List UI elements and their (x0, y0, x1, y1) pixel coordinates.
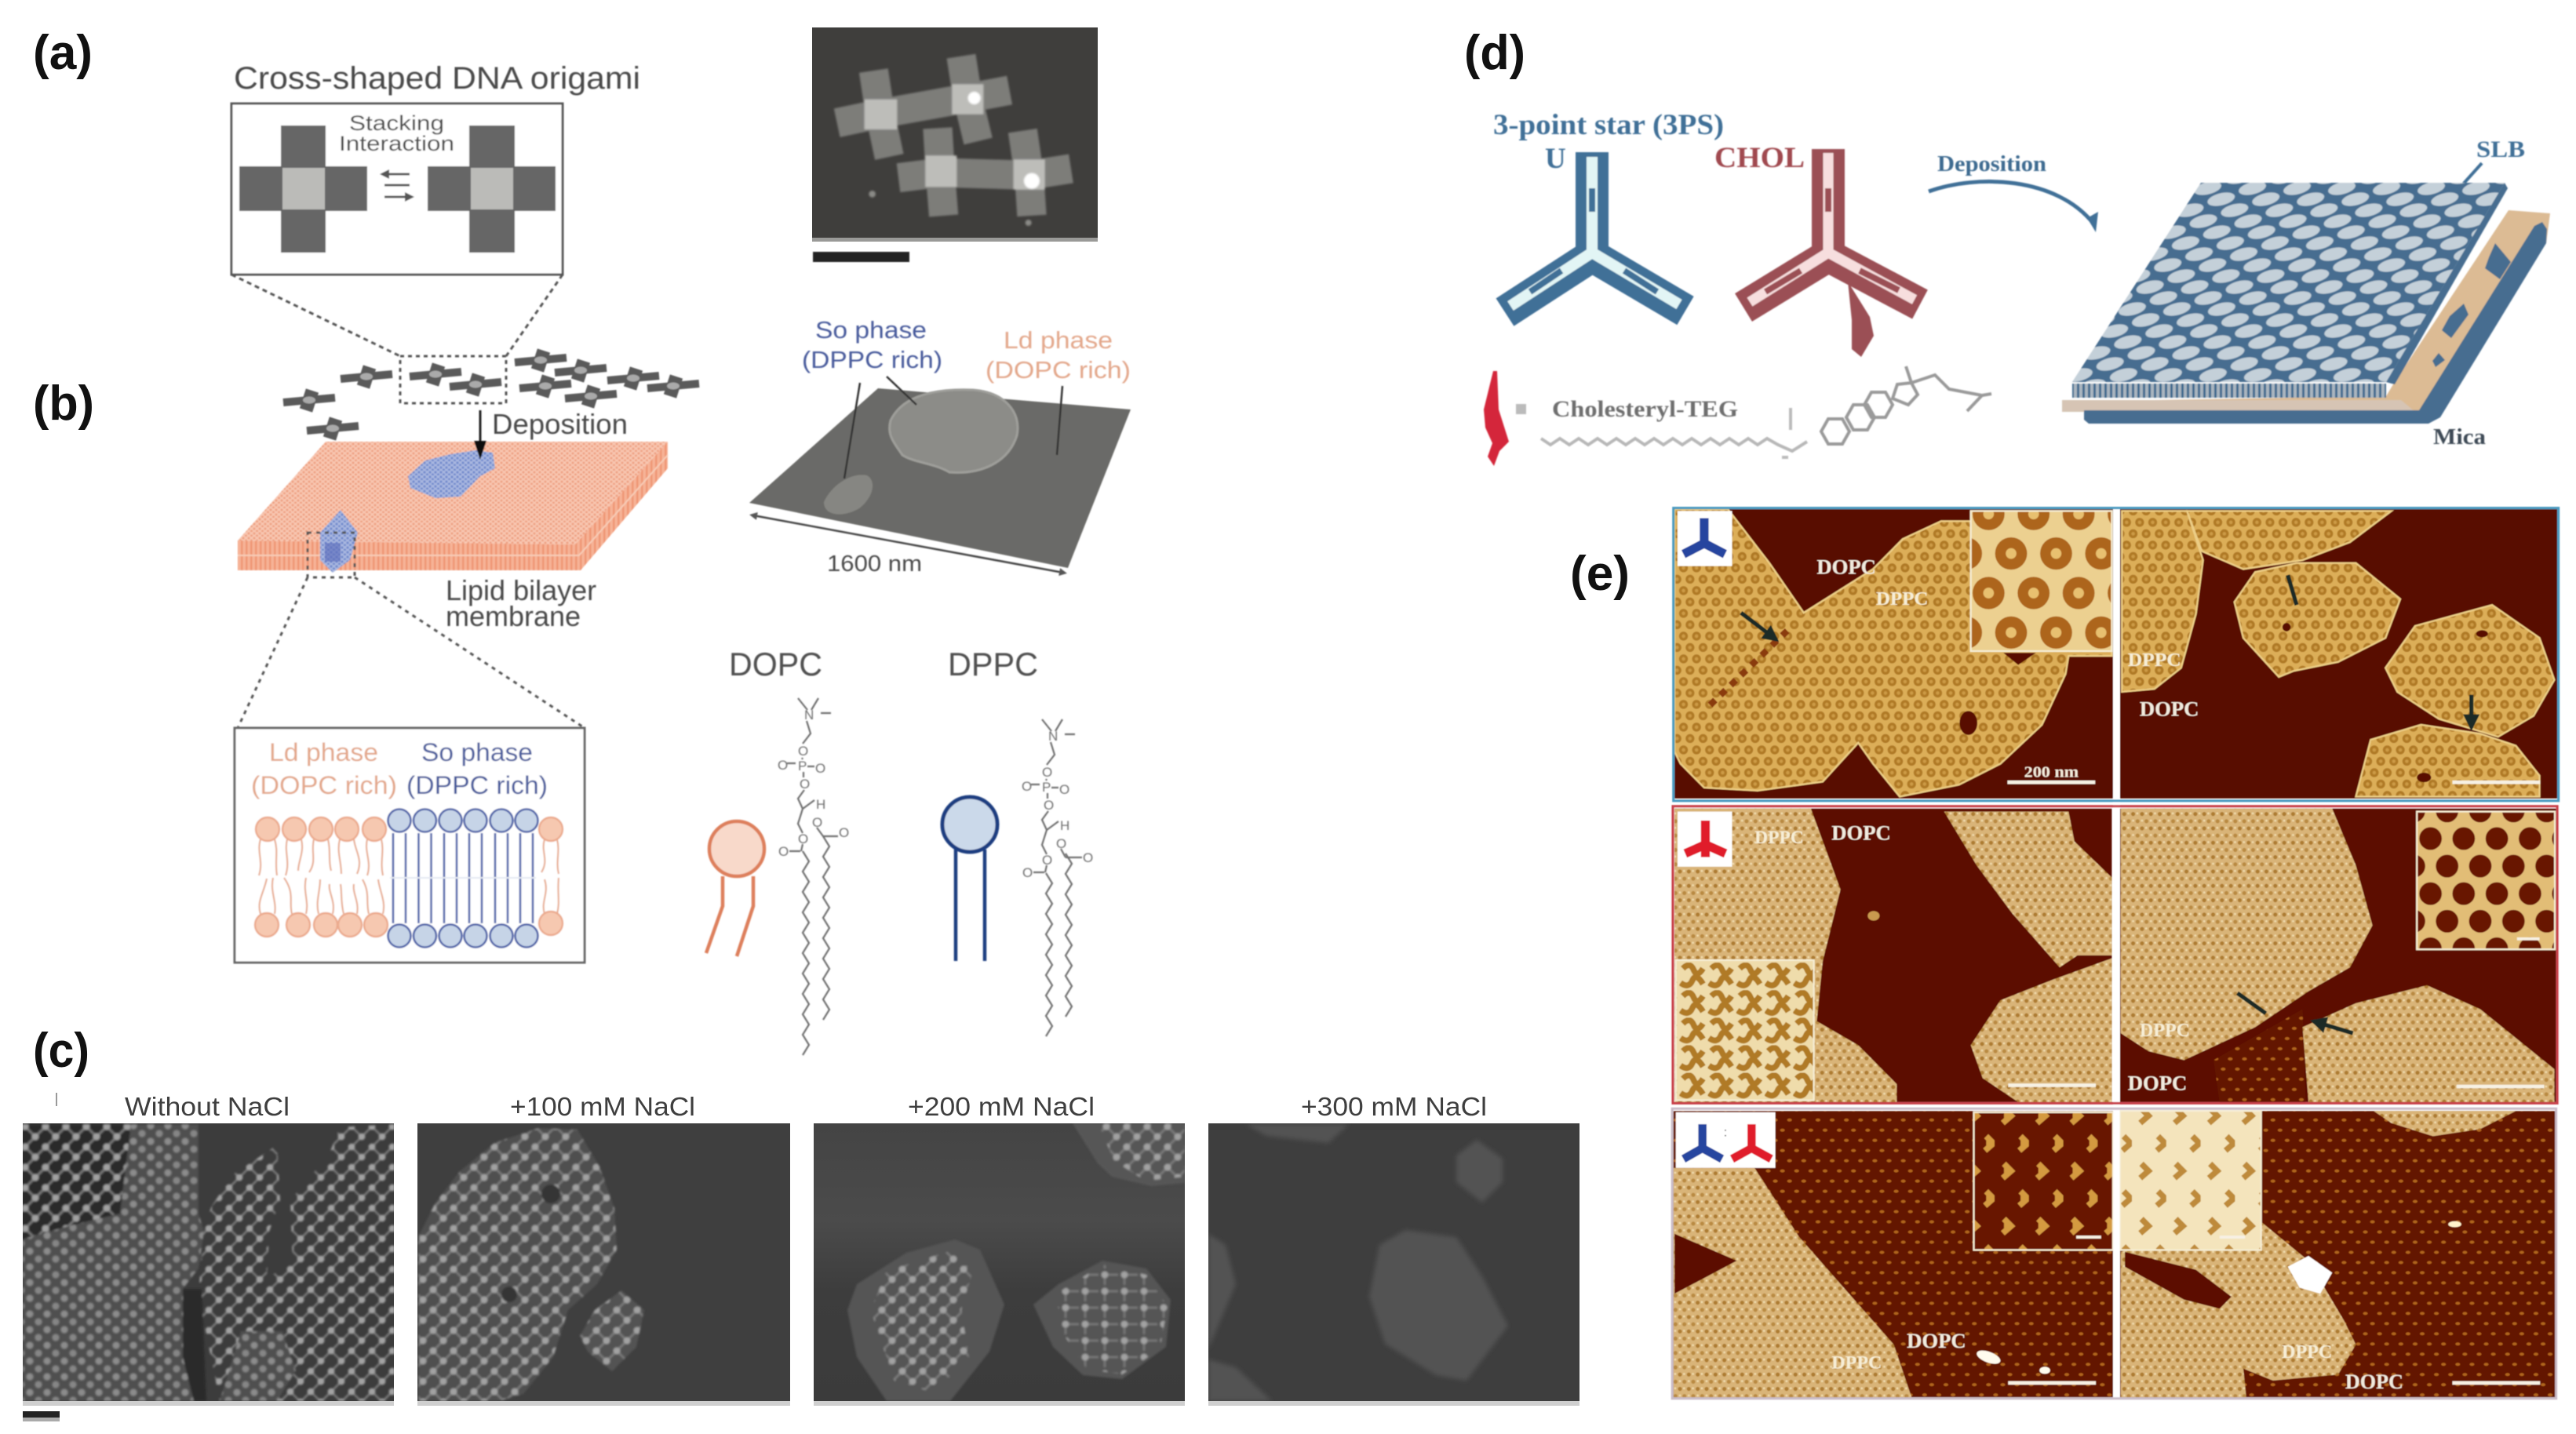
blue Y-shaped 3PS motif (1505, 152, 1685, 312)
row 1 right: U-type AFM image: DPPC (2128, 650, 2181, 671)
DPPC lipid: name, cartoon and structure: O (1042, 853, 1052, 868)
AFM image: +100 mM NaCl (417, 1123, 790, 1401)
column heading: +300 mM NaCl: +300 mM NaCl (1301, 1092, 1487, 1121)
label: CHOL strand: CHOL (1714, 142, 1805, 174)
heading: 3-point star: 3-point star (3PS) (1493, 109, 1724, 141)
membrane surface with domains (749, 377, 1131, 568)
dotted selection box (400, 356, 506, 403)
row 2 right: CHOL-type AFM image (2120, 809, 2556, 1102)
AFM image: +300 mM NaCl (1208, 1123, 1579, 1401)
DPPC lipid: name, cartoon and structure: O (1056, 836, 1066, 851)
heading: cross-shaped DNA origami: Cross-shaped DNA origami (234, 61, 640, 96)
panel label (c): (c) (33, 1024, 89, 1078)
dotted selection on membrane and zoom lines (238, 533, 585, 728)
row 3 left: mixed AFM image (1674, 1111, 2113, 1397)
column heading: without NaCl: Without NaCl (125, 1092, 290, 1121)
row 1 left: U-type AFM image: 200 nm (2024, 763, 2079, 781)
row 1 left: U-type AFM image (1674, 509, 2113, 799)
lipid bilayer membrane slab (238, 442, 668, 573)
row 2 left: CHOL-type AFM image: DOPC (1831, 821, 1891, 845)
DOPC lipid: name, cartoon and structure: DOPC (729, 646, 822, 682)
inset: stacking interaction box: Stacking (349, 111, 444, 135)
row 1 left: U-type AFM image: DPPC (1876, 588, 1928, 610)
label: U strand: U (1545, 143, 1566, 175)
panel label (b): (b) (33, 377, 94, 431)
DOPC lipid: name, cartoon and structure: O (812, 815, 822, 830)
1600 nm arrow (753, 515, 1063, 573)
So phase label: (DPPC rich) (802, 346, 942, 373)
column heading: +200 mM NaCl: +200 mM NaCl (908, 1092, 1095, 1121)
dotted zoom lines to the origami (231, 275, 563, 356)
inset: Ld and So phase bilayer (235, 728, 585, 963)
DOPC lipid: name, cartoon and structure: O (839, 825, 849, 840)
row 3 right: mixed AFM image (2120, 1111, 2556, 1397)
inset: Ld and So phase bilayer: So phase (421, 738, 533, 766)
DPPC lipid: name, cartoon and structure: H (1060, 818, 1069, 833)
3D AFM topography of phase-separated membrane (749, 316, 1131, 577)
row 2 left: CHOL-type AFM image (1674, 809, 2111, 1102)
panel: AFM images of 3PS lattices on phase-separated bilayers (1672, 508, 2559, 1399)
row 2 left: CHOL-type AFM image: DPPC (1754, 828, 1804, 847)
DOPC lipid: name, cartoon and structure: O (798, 744, 808, 759)
row 3 left: mixed AFM image: DOPC (1907, 1330, 1966, 1352)
DPPC lipid: name, cartoon and structure: O (1044, 798, 1054, 813)
row 1 right: U-type AFM image: DOPC (2140, 697, 2199, 720)
pointer line to SLB (2454, 163, 2482, 194)
label: SLB: SLB (2476, 136, 2525, 162)
DPPC lipid: name, cartoon and structure: O (1022, 865, 1033, 880)
inset: Ld and So phase bilayer: (DOPC rich) (251, 771, 397, 799)
legend swatch (1516, 404, 1526, 414)
supported lipid bilayer plate on mica (2062, 183, 2550, 424)
row 1 left: U-type AFM image: DOPC (1816, 555, 1876, 579)
label: lipid bilayer membrane: membrane (446, 600, 581, 632)
origami crosses on the membrane (283, 351, 699, 439)
inset: Ld and So phase bilayer: Ld phase (269, 738, 378, 766)
DOPC lipid: name, cartoon and structure: O (815, 761, 825, 776)
DOPC lipid: name, cartoon and structure (706, 646, 849, 1055)
DOPC lipid: name, cartoon and structure: O (800, 777, 810, 792)
DPPC lipid: name, cartoon and structure (942, 646, 1093, 1036)
AFM image: without NaCl (22, 1123, 395, 1401)
row 3 right: mixed AFM image: DOPC (2345, 1370, 2403, 1393)
scale bar for AFM image (813, 252, 909, 262)
DPPC lipid: name, cartoon and structure: O (1022, 779, 1032, 794)
arrow: deposition (1929, 181, 2098, 232)
DOPC lipid: name, cartoon and structure: H (816, 797, 825, 812)
DPPC lipid: name, cartoon and structure: O (1083, 850, 1093, 865)
row 2 right: CHOL-type AFM image: DOPC (2128, 1072, 2187, 1095)
label: Mica: Mica (2433, 425, 2486, 449)
column heading: +100 mM NaCl: +100 mM NaCl (510, 1092, 695, 1121)
panel: schematic of cross-shaped DNA origami deposited on a lipid bilayer (231, 61, 699, 963)
label: cholesteryl-TEG: Cholesteryl-TEG (1552, 396, 1738, 422)
DOPC lipid: name, cartoon and structure: N (804, 708, 814, 722)
DPPC lipid: name, cartoon and structure: P (1042, 780, 1051, 795)
panel: AFM images at increasing NaCl (22, 1092, 1579, 1421)
row 3 right: mixed AFM image: DPPC (2282, 1341, 2332, 1363)
scale bar for NaCl series (23, 1411, 60, 1418)
red Y-shaped 3PS motif with cholesterol tail (1743, 149, 1920, 357)
structure: TEG linker and sterol rings (1541, 366, 1991, 457)
row 3 left: mixed AFM image: DPPC (1831, 1352, 1882, 1373)
DPPC lipid: name, cartoon and structure: O (1042, 765, 1052, 780)
1600 nm label: 1600 nm (827, 551, 922, 577)
row 1 right: U-type AFM image (2120, 509, 2557, 799)
DOPC lipid: name, cartoon and structure: O (798, 832, 808, 846)
inset: Ld and So phase bilayer: (DPPC rich) (406, 771, 548, 799)
vertical divider and coloured row borders (1672, 508, 2559, 1399)
icon: red cholesterol tag (1484, 371, 1509, 466)
Ld phase label: Ld phase (1004, 326, 1113, 354)
panel label (d): (d) (1464, 26, 1525, 80)
DOPC lipid: name, cartoon and structure: P (798, 759, 807, 773)
DOPC lipid: name, cartoon and structure: O (778, 844, 789, 859)
DPPC lipid: name, cartoon and structure: O (1059, 782, 1069, 797)
label: lipid bilayer membrane: Lipid bilayer (446, 574, 596, 606)
AFM image: +200 mM NaCl (814, 1123, 1185, 1401)
So phase label: So phase (815, 316, 927, 344)
Ld phase label: (DOPC rich) (986, 356, 1131, 384)
DPPC lipid: name, cartoon and structure: N (1048, 729, 1058, 744)
DOPC lipid: name, cartoon and structure: O (778, 758, 788, 773)
inset: stacking interaction box (231, 104, 563, 275)
arrow: deposition (474, 410, 486, 460)
panel label (a): (a) (33, 26, 93, 80)
panel label (e): (e) (1570, 547, 1630, 601)
AFM image: cross-shaped origami assemblies (812, 27, 1098, 242)
label: deposition: Deposition (492, 408, 628, 440)
label: deposition: Deposition (1937, 152, 2046, 177)
panel: 3-point star schematic (1484, 109, 2550, 466)
row 2 right: CHOL-type AFM image: DPPC (2140, 1020, 2190, 1041)
inset: stacking interaction box: Interaction (339, 132, 454, 155)
row 3 left: mixed AFM image: : (1724, 1126, 1727, 1139)
DPPC lipid: name, cartoon and structure: DPPC (948, 646, 1038, 682)
